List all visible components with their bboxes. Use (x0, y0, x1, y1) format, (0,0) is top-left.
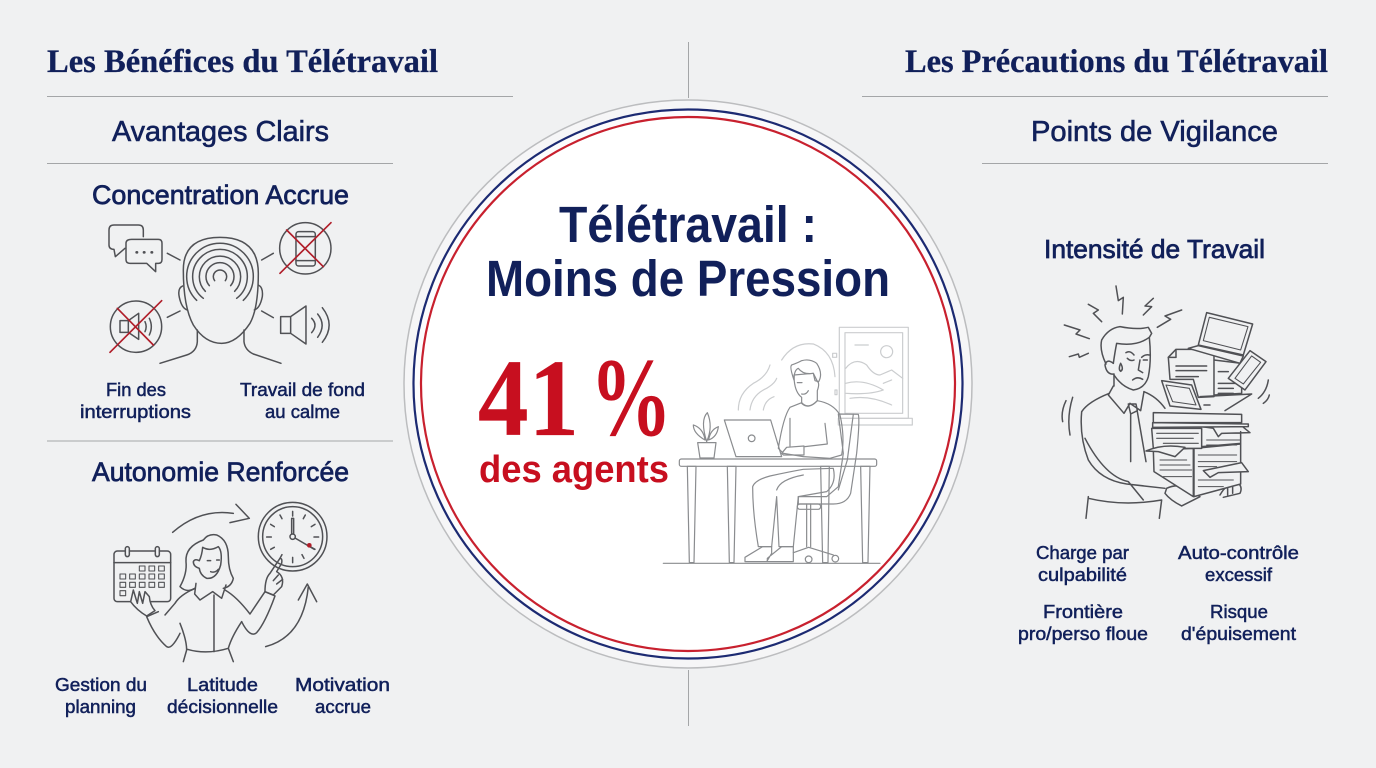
label: blurred boundary (1018, 601, 1148, 644)
illustration: man at desk (663, 327, 912, 563)
phone (1228, 351, 1266, 390)
main title: Moins de Pression (486, 250, 890, 307)
label: des agents: des agents (479, 449, 669, 491)
paper stack (1146, 413, 1250, 497)
icon: stressed worker with paper stack (1062, 286, 1269, 518)
statistic: 41 %: % (590, 336, 672, 460)
label: deep work (240, 379, 365, 422)
label: motivation: accrue (315, 696, 371, 717)
label: planning management: planning (65, 696, 136, 717)
label: burnout risk (1181, 601, 1296, 644)
man (745, 360, 843, 562)
heading: benefits: Les Bénéfices du Télétravail (47, 44, 438, 80)
label: motivation: Motivation (295, 674, 390, 695)
label: blurred boundary: Frontière (1043, 601, 1123, 622)
statistic: 41 % (478, 336, 672, 460)
heading: precautions: Les Précautions du Télétravail (905, 44, 1328, 80)
subheading: points of vigilance: Points de Vigilance (1031, 116, 1278, 148)
panel: left benefits (47, 44, 513, 717)
subheading: work intensity: Intensité de Travail (1044, 234, 1265, 264)
label: end of interruptions: Fin des (106, 379, 166, 400)
label: burnout risk: d'épuisement (1181, 623, 1296, 644)
label: deep work: au calme (265, 401, 340, 422)
label: blurred boundary: pro/perso floue (1018, 623, 1148, 644)
label: end of interruptions (80, 379, 191, 422)
chair (793, 414, 859, 563)
subheading: focus: Concentration Accrue (92, 180, 349, 210)
subheading: clear advantages: Avantages Clairs (112, 116, 329, 148)
label: deep work: Travail de fond (240, 379, 365, 400)
statistic: 41 %: 41 (478, 337, 579, 459)
window (838, 327, 912, 425)
icon: head with distractions (109, 223, 331, 363)
label: motivation (295, 674, 390, 717)
plant (693, 413, 718, 458)
main title (486, 196, 890, 307)
label: guilt-driven workload: culpabilité (1038, 564, 1127, 585)
panel: right precautions (862, 44, 1328, 644)
label: excessive self-control: excessif (1205, 564, 1273, 585)
label: end of interruptions: interruptions (80, 401, 191, 422)
worker (1081, 327, 1241, 518)
label: excessive self-control: Auto-contrôle (1178, 542, 1299, 563)
icon: woman with calendar and clock (114, 502, 327, 662)
laptop (1188, 313, 1253, 363)
label: planning management: Gestion du (55, 674, 147, 695)
label: guilt-driven workload (1036, 542, 1129, 585)
floating document (1168, 349, 1242, 397)
tablet (1162, 381, 1201, 409)
label: planning management (55, 674, 147, 717)
panel: central circle (404, 100, 972, 668)
label: decision latitude (167, 674, 278, 717)
label: decision latitude: Latitude (187, 674, 258, 695)
label: excessive self-control (1178, 542, 1299, 585)
main title: Télétravail : (559, 196, 817, 253)
label: burnout risk: Risque (1210, 601, 1268, 622)
label: decision latitude: décisionnelle (167, 696, 278, 717)
label: guilt-driven workload: Charge par (1036, 542, 1129, 563)
subheading: autonomy: Autonomie Renforcée (92, 457, 349, 487)
